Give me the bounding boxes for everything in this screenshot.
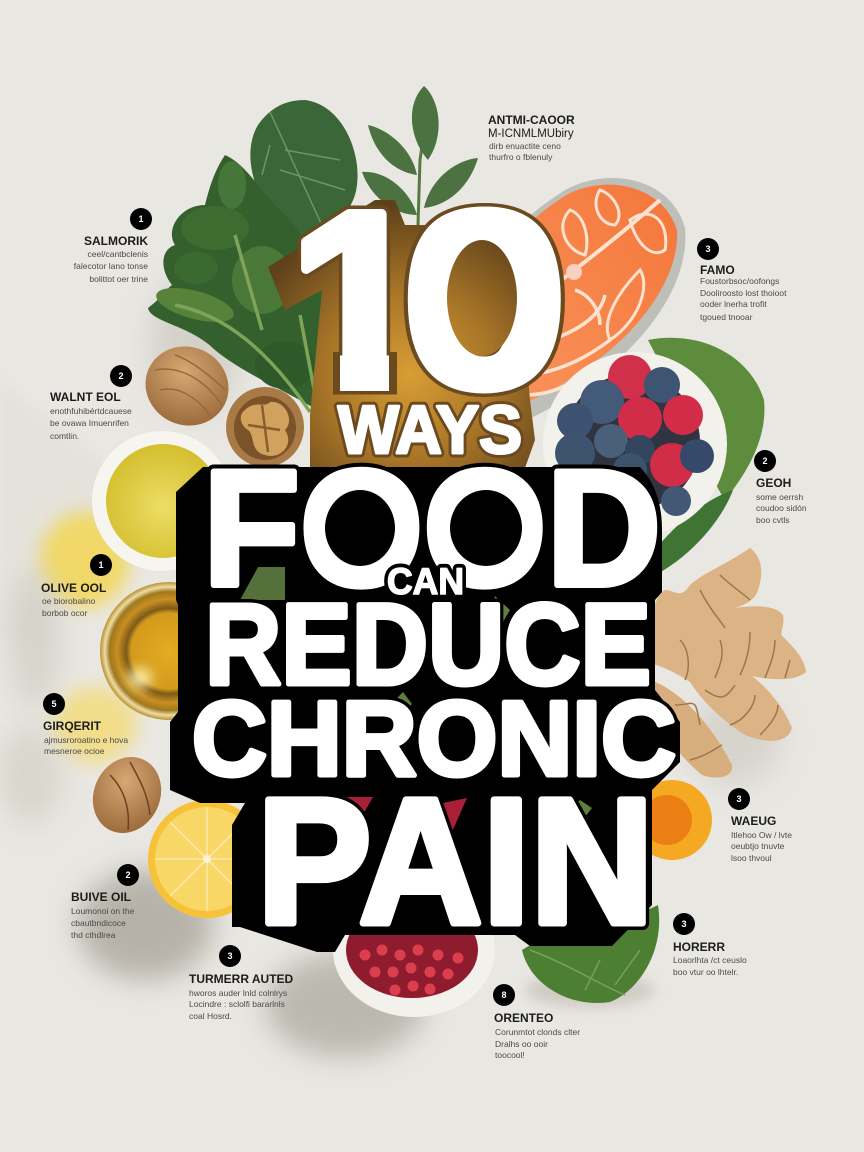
food: parsley greens — [148, 155, 325, 415]
food: olive oil bowl — [92, 431, 232, 571]
label 3: Horerr — [673, 913, 747, 977]
label 8: Orenteo — [493, 984, 580, 1060]
label 3: Waeug — [728, 788, 792, 863]
label 1: Olive Ool: borbob ocor — [42, 608, 88, 618]
label 3: Waeug: lsoo thvoul — [731, 853, 772, 863]
label 3: Waeug: Itlehoo Ow / lvte — [731, 830, 792, 840]
label 3: Famo: Dooliroosto lost thoioot — [700, 288, 787, 298]
label 2: Walnt Eol: be ovawa Imuenrifen — [50, 418, 129, 428]
label 3: Famo: 3 — [705, 244, 711, 254]
label 2: Buive Oil — [71, 864, 139, 940]
food: orange half — [632, 780, 712, 860]
food: walnut lower — [81, 746, 173, 844]
label 2: Geoh: GEOH — [756, 476, 791, 490]
label: Anti-Caoor: thurfro o fblenuly — [489, 152, 553, 162]
label 2: Geoh: some oerrsh — [756, 492, 804, 502]
headline CAN: CAN — [387, 561, 464, 602]
label 2: Geoh: 2 — [762, 456, 768, 466]
label: Anti-Caoor: dirb enuactite ceno — [489, 141, 561, 151]
soft cast shadows — [0, 275, 780, 1057]
numeral 10 — [298, 203, 565, 397]
food: lemon slice — [148, 800, 266, 918]
numeral 10: 0 — [402, 160, 567, 439]
label: Anti-Caoor: M-ICNMLMUbiry — [488, 128, 574, 140]
numeral 10: 1 — [289, 160, 428, 439]
label 5: Girqerit: ajmusroroatino e hova — [44, 735, 128, 745]
label 2: Geoh: coudoo sidón — [756, 503, 807, 513]
food: walnut whole — [132, 333, 242, 439]
label 3: Turmerr Auted: Locindre : sclolfi bararlnls — [189, 999, 285, 1009]
label 3: Horerr: Loaorlhta /ct ceuslo — [673, 955, 747, 965]
label 3: Turmerr Auted: coal Hosrd. — [189, 1011, 232, 1021]
label 5: Girqerit — [43, 693, 128, 756]
label 3: Waeug: 3 — [736, 794, 742, 804]
word WAYS: WAYS — [338, 392, 522, 468]
label 3: Turmerr Auted: hworos auder lnld colnlrys — [189, 988, 287, 998]
label: Anti-Caoor: ANTMI-CAOOR — [488, 113, 575, 127]
label 5: Girqerit: mesneroe ocioe — [44, 746, 105, 756]
label 5: Girqerit: 5 — [51, 699, 57, 709]
label 3: Waeug: oeubtjo tnuvte — [731, 841, 785, 851]
label 1: Salmorik: SALMORIK — [84, 234, 148, 248]
headline REDUCE: REDUCE — [205, 581, 651, 709]
label 2: Buive Oil: BUIVE OIL — [71, 890, 131, 904]
food: red berries bowl — [333, 883, 495, 1017]
label 3: Famo: Foustorbsoc/oofongs — [700, 276, 779, 286]
label 1: Olive Ool — [41, 554, 112, 618]
label 3: Waeug: WAEUG — [731, 814, 776, 828]
label 8: Orenteo: ORENTEO — [494, 1011, 553, 1025]
label 3: Horerr: boo vtur oo lhtelr. — [673, 967, 738, 977]
headline REDUCE: REDUCE — [205, 581, 651, 709]
label 3: Turmerr Auted: 3 — [227, 951, 233, 961]
label 1: Salmorik — [74, 208, 152, 284]
label 1: Olive Ool: OLIVE OOL — [41, 581, 106, 595]
numeral 10: 1 — [289, 160, 428, 439]
label 2: Walnt Eol: enothfuhibértdcauese — [50, 406, 132, 416]
label 2: Geoh: boo cvtls — [756, 515, 790, 525]
label 3: Famo: FAMO — [700, 263, 735, 277]
food: ginger root — [645, 548, 806, 778]
label 2: Walnt Eol: WALNT EOL — [50, 390, 121, 404]
food: berries bowl — [543, 352, 727, 536]
label 3: Horerr: 3 — [681, 919, 687, 929]
food: salmon steak — [500, 178, 685, 430]
label 1: Salmorik: ceel/cantbclenis — [88, 249, 148, 259]
label 1: Olive Ool: oe biorobalino — [42, 596, 96, 606]
headline PAIN: PAIN — [257, 761, 654, 961]
label 5: Girqerit: GIRQERIT — [43, 719, 102, 733]
label 8: Orenteo: toocool! — [495, 1050, 525, 1060]
label 3: Horerr: HORERR — [673, 940, 725, 954]
label 2: Walnt Eol: comtlin. — [50, 431, 79, 441]
leaf and berries peeking through lettering — [240, 567, 592, 832]
label 2: Buive Oil: Loumonoi on the — [71, 906, 135, 916]
label 2: Geoh — [754, 450, 807, 525]
food: bottom leaf — [522, 905, 659, 1003]
golden glow behind 10 — [268, 200, 535, 468]
label 1: Salmorik: bolittot oer trine — [89, 274, 148, 284]
label 2: Buive Oil: 2 — [125, 870, 131, 880]
label 2: Walnt Eol — [50, 365, 132, 441]
headline CAN: CAN — [387, 561, 464, 602]
food: dark leaf right — [630, 338, 764, 586]
label 3: Famo: tgoued tnooar — [700, 312, 753, 322]
label 8: Orenteo: 8 — [501, 990, 507, 1000]
food: walnut half — [226, 387, 304, 467]
headline CHRONIC: CHRONIC — [192, 680, 676, 798]
label 2: Walnt Eol: 2 — [118, 371, 124, 381]
headline CHRONIC: CHRONIC — [192, 680, 676, 798]
label 1: Salmorik: falecotor lano tonse — [74, 261, 148, 271]
headline PAIN: PAIN — [257, 761, 654, 961]
label 3: Turmerr Auted: TURMERR AUTED — [189, 972, 294, 986]
numeral 10: 0 — [402, 160, 567, 439]
food: herb sprig — [362, 86, 478, 225]
label 3: Famo — [697, 238, 787, 322]
label 1: Salmorik: 1 — [138, 214, 144, 224]
label 8: Orenteo: Dralhs oo ooir — [495, 1039, 548, 1049]
word WAYS: WAYS — [338, 392, 522, 468]
food: spinach leaf top — [250, 100, 358, 236]
label 3: Famo: ooder lnerha trofit — [700, 299, 767, 309]
headline FOOD: FOOD — [203, 436, 661, 620]
label 2: Buive Oil: thd cthdlrea — [71, 930, 116, 940]
title black backing — [170, 467, 680, 952]
label 3: Turmerr Auted — [189, 945, 294, 1021]
headline FOOD: FOOD — [203, 436, 661, 620]
label: Anti-Caoor — [488, 113, 575, 162]
food: oil glass — [100, 582, 238, 720]
label 2: Buive Oil: cbautbndicoce — [71, 918, 126, 928]
label 1: Olive Ool: 1 — [98, 560, 104, 570]
label 8: Orenteo: Corunmtot clonds clter — [495, 1027, 580, 1037]
